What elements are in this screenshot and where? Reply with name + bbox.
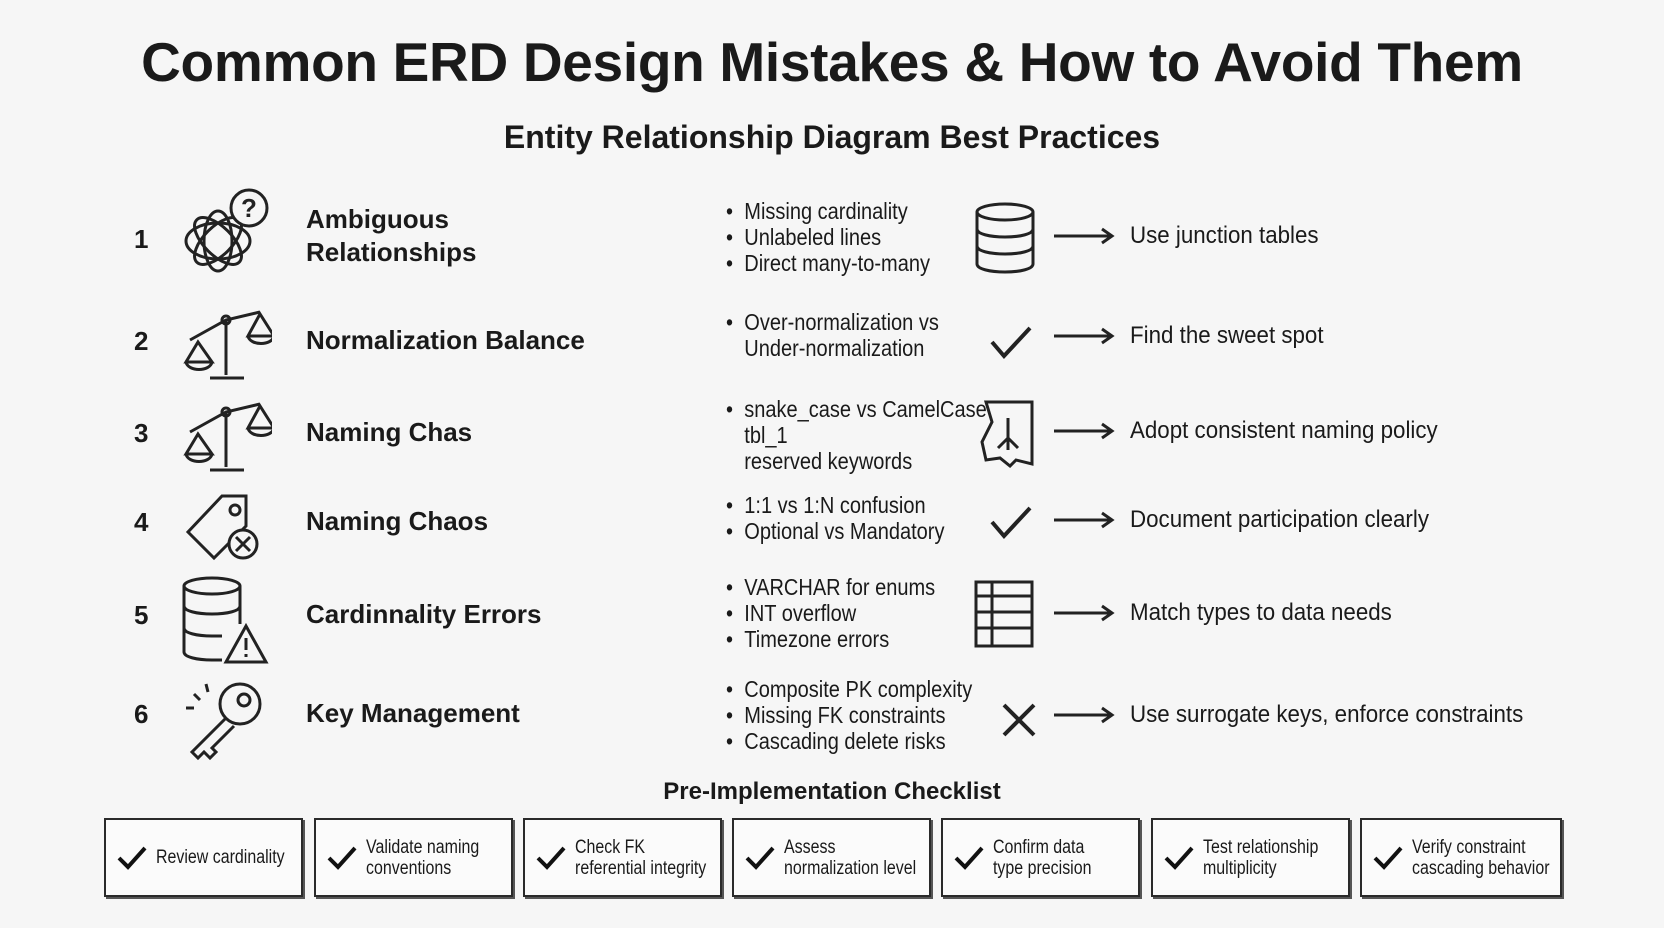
subtitle: Entity Relationship Diagram Best Practices [504, 119, 1160, 155]
icon: document [980, 400, 1034, 468]
bullets 3 [726, 396, 987, 474]
checklist item 3 [523, 818, 722, 897]
number 4: 4 [134, 507, 148, 537]
result 5: Match types to data needs [1130, 599, 1392, 626]
result 6: Use surrogate keys, enforce constraints [1130, 701, 1523, 728]
icon: tangled relationships: ? [241, 193, 257, 223]
bullets 6: Composite PK complexity [744, 676, 972, 702]
bullets 1 [726, 198, 930, 276]
number 1: 1 [134, 224, 148, 254]
bullets 4 [726, 492, 944, 544]
label 4: Naming Chaos [306, 506, 488, 536]
bullets 2: Under-normalization [744, 335, 924, 361]
checklist item 5: Confirm data [993, 836, 1084, 858]
bullets 2 [726, 309, 939, 361]
checklist item 1: Review cardinality [156, 847, 285, 868]
arrow 2 [1054, 328, 1114, 344]
checklist item 2: conventions [366, 858, 451, 878]
arrow 1 [1054, 228, 1114, 244]
checklist item 4: normalization level [784, 858, 916, 878]
result 1: Use junction tables [1130, 222, 1319, 249]
bullets 1: Unlabeled lines [744, 224, 881, 250]
icon: check [990, 326, 1032, 359]
bullets 2: Over-normalization vs [744, 309, 939, 335]
bullets 4: Optional vs Mandatory [744, 518, 944, 544]
label 3: Naming Chas [306, 417, 472, 447]
bullets 1: Direct many-to-many [744, 250, 930, 276]
bullets 6: Cascading delete risks [744, 728, 946, 754]
checklist item 6: Test relationship [1203, 836, 1318, 858]
number 3: 3 [134, 418, 148, 448]
icon: tag with x [186, 494, 258, 560]
bullets 5: Timezone errors [744, 626, 889, 652]
checklist item 4: Assess [784, 836, 835, 858]
label 1: Relationships [306, 237, 476, 267]
label 1: Ambiguous [306, 204, 449, 234]
checklist item 7: Verify constraint [1412, 836, 1526, 858]
number 5: 5 [134, 600, 148, 630]
icon: cross [1002, 704, 1036, 736]
arrow 3 [1054, 422, 1114, 440]
arrow 5 [1054, 604, 1114, 622]
checklist item 2 [314, 818, 513, 897]
bullets 4: 1:1 vs 1:N confusion [744, 492, 926, 518]
bullets 5: VARCHAR for enums [744, 574, 935, 600]
checklist item 6 [1151, 818, 1350, 897]
number 6: 6 [134, 699, 148, 729]
checklist item 7 [1360, 818, 1562, 897]
icon: database [976, 202, 1034, 274]
bullets 5 [726, 574, 935, 652]
arrow 4 [1054, 512, 1114, 528]
checklist item 5 [941, 818, 1140, 897]
result 2: Find the sweet spot [1130, 322, 1324, 349]
checklist item 5: type precision [993, 858, 1091, 878]
result 4: Document participation clearly [1130, 506, 1429, 533]
checklist item 2: Validate naming [366, 836, 479, 858]
icon: scale [183, 310, 272, 380]
number 2: 2 [134, 326, 148, 356]
arrow 6 [1054, 706, 1114, 724]
bullets 5: INT overflow [744, 600, 856, 626]
icon: tangled relationships [184, 188, 268, 272]
checklist item 3: referential integrity [575, 858, 706, 878]
icon: scale 2 [183, 402, 272, 472]
bullets 1: Missing cardinality [744, 198, 908, 224]
checklist item 1 [104, 818, 303, 897]
label 2: Normalization Balance [306, 325, 585, 355]
label 6: Key Management [306, 698, 520, 728]
bullets 6: Missing FK constraints [744, 702, 946, 728]
bullets 3: reserved keywords [744, 448, 912, 474]
bullets 3: tbl_1 [744, 422, 788, 448]
label 5: Cardinnality Errors [306, 599, 542, 629]
icon: table [974, 580, 1034, 648]
checklist item 6: multiplicity [1203, 858, 1277, 878]
title: Common ERD Design Mistakes & How to Avoid Them [141, 31, 1523, 93]
checklist item 7: cascading behavior [1412, 858, 1550, 878]
checklist item 3: Check FK [575, 836, 645, 858]
result 3: Adopt consistent naming policy [1130, 417, 1438, 444]
checklist heading: Pre-Implementation Checklist [663, 778, 1001, 805]
checklist item 4 [732, 818, 931, 897]
bullets 3: snake_case vs CamelCase [744, 396, 987, 422]
bullets 6 [726, 676, 972, 754]
icon: check 2 [990, 506, 1032, 539]
label 1 [306, 204, 476, 267]
icon: database warning [182, 576, 268, 664]
icon: key [186, 682, 262, 760]
